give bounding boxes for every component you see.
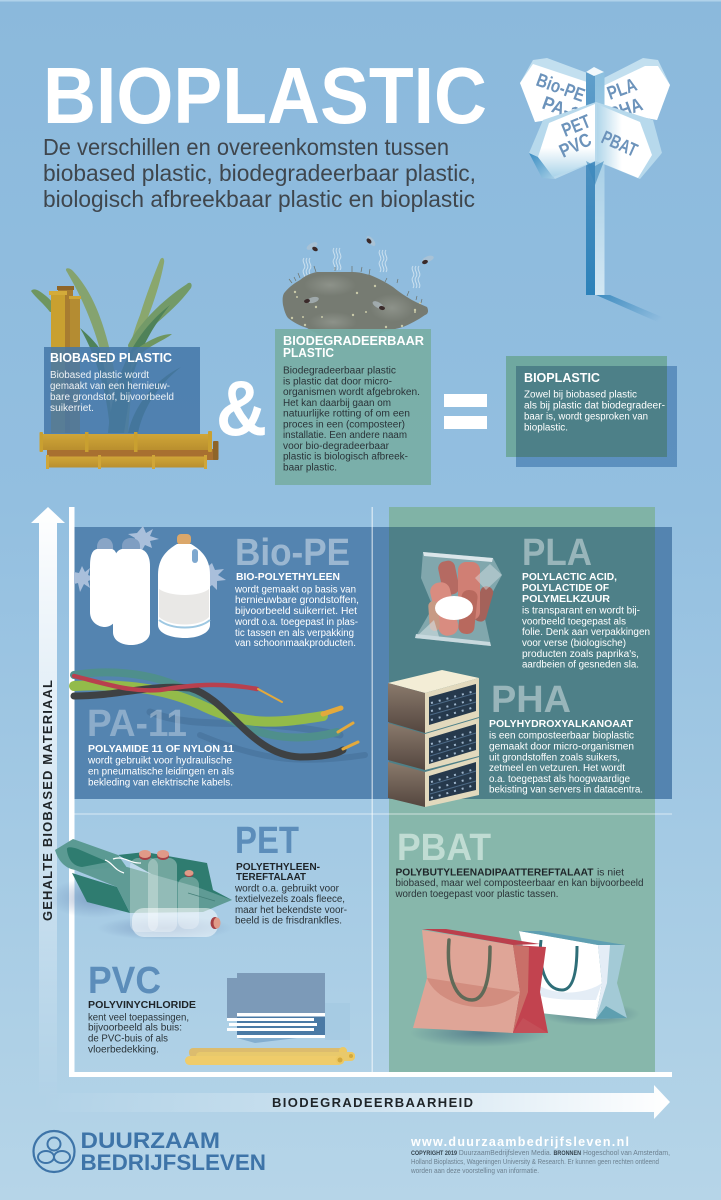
text block: PHA: POLYHYDROXYALKANOAAT — [489, 719, 633, 730]
text block: PHA — [489, 719, 643, 796]
text block: PA-11: bekleding van elektrische kabels. — [88, 778, 233, 788]
logo: duurzaam bedrijfsleven — [34, 1128, 266, 1175]
text block: biobased plastic — [50, 370, 174, 414]
icon: signpost: PVC — [556, 129, 595, 163]
text block: Bio-PE: wordt o.a. toegepast in plas- — [234, 617, 358, 628]
subtitle: biologisch afbreekbaar plastic en bioplastic — [43, 186, 475, 212]
arrow: vertical axis — [31, 507, 65, 1100]
text block: PVC: de PVC-buis of als — [88, 1034, 168, 1044]
text block: Bio-PE: wordt gemaakt op basis van — [234, 584, 356, 596]
panel: bioplastic — [506, 356, 677, 467]
website url: www.duurzaambedrijfsleven.nl — [410, 1135, 629, 1149]
text block: Bio-PE: van schoonmaakproducten. — [235, 638, 356, 649]
text block: PBAT: is niet — [597, 868, 624, 878]
wordmark: DUURZAAM — [80, 1128, 220, 1153]
text block: PVC: POLYVINYCHLORIDE — [88, 1000, 196, 1011]
text block: PLA: folie. Denk aan verpakkingen — [522, 627, 650, 638]
text block: PLA: voorbeeld toegepast als — [522, 616, 626, 628]
copyright and sources — [410, 1148, 670, 1175]
heading: Bio-PE: Bio-PE — [235, 532, 350, 574]
text block: PBAT: POLYBUTYLEENADIPAATTEREFTALAAT — [396, 868, 594, 878]
arrow: horizontal axis — [40, 1085, 670, 1119]
text block: biodegradeerbaar plastic: baar plastic. — [283, 462, 337, 473]
copyright and sources: worden aan deze voorstelling van informatie. — [410, 1166, 539, 1175]
text block: PA-11: en pneumatische leidingen en als — [88, 766, 234, 778]
icon: sugarcane leaves and bamboo canes — [31, 258, 192, 433]
text block: PA-11: wordt gebruikt voor hydraulische — [87, 756, 232, 766]
text block: PET: POLYETHYLEEN- — [236, 862, 320, 873]
text block: bioplastic — [524, 390, 665, 434]
copyright and sources: COPYRIGHT 2019 DuurzaamBedrijfsleven Media. BRONNEN Hogeschool van Amsterdam, — [411, 1148, 670, 1157]
text block: biobased plastic: suikerriet. — [50, 403, 94, 414]
heading: bioplastic: BIOPLASTIC — [524, 371, 600, 385]
heading: PVC: PVC — [88, 960, 161, 1002]
icon: vinyl flooring and PVC pipes — [185, 973, 355, 1065]
text block: biodegradeerbaar plastic — [283, 366, 420, 473]
text block: PLA — [522, 572, 650, 670]
text block: biodegradeerbaar plastic: natuurlijke rotting of om een — [283, 408, 410, 420]
panel: matrix background — [69, 507, 672, 1077]
text block: biobased plastic: gemaakt van een hernieuw- — [50, 381, 170, 392]
text block: PET: textielvezels zoals fleece, — [235, 894, 345, 905]
icon: compost heap with flies — [283, 235, 435, 338]
icon: server crates — [388, 670, 479, 807]
icon: signpost — [520, 58, 676, 323]
text block: PET — [234, 862, 347, 926]
text block: biodegradeerbaar plastic: Het kan daarbij gaan om — [283, 398, 391, 409]
icon: bottles and jug — [74, 526, 226, 645]
text block: PVC: bijvoorbeeld als buis: — [88, 1022, 182, 1034]
text block: PA-11 — [87, 744, 234, 788]
icon: signpost: Bio-PE — [533, 70, 587, 107]
heading: PET: PET — [235, 820, 299, 862]
text block: bioplastic: Zowel bij biobased plastic — [524, 390, 637, 400]
icon: signpost: PBAT — [598, 127, 641, 162]
text block: biobased plastic: Biobased plastic wordt — [50, 370, 149, 381]
text block: PHA: gemaakt door micro-organismen — [489, 742, 634, 752]
heading: PA-11: PA-11 — [87, 703, 187, 745]
copyright and sources: Holland Bioplastics, Wageningen University & Research. Er kunnen geen rechten ontleend — [411, 1157, 659, 1166]
text block: biodegradeerbaar plastic: proces in een (composteer) — [283, 419, 405, 430]
text block: Bio-PE: tic tassen en als verpakking — [235, 628, 354, 639]
text block: PBAT — [395, 868, 644, 900]
text block: biodegradeerbaar plastic: installatie. Een andere naam — [283, 430, 407, 441]
text block: PVC — [88, 1000, 196, 1056]
text block: PET: maar het bekendste voor- — [235, 905, 347, 916]
text block: Bio-PE: hernieuwbare grondstoffen, — [235, 595, 359, 606]
heading: biodegradeerbaar plastic — [283, 334, 424, 360]
heading: biodegradeerbaar plastic: PLASTIC — [283, 346, 334, 360]
text block: PLA: is transparant en wordt bij- — [522, 606, 640, 616]
subtitle: De verschillen en overeenkomsten tussen — [43, 134, 449, 160]
text block: PET: beeld is de frisdrankfles. — [235, 916, 342, 926]
text block: bioplastic: als bij plastic dat biodegradeer- — [524, 400, 665, 412]
text block: PA-11: POLYAMIDE 11 OF NYLON 11 — [88, 744, 234, 755]
text block: PVC: kent veel toepassingen, — [88, 1012, 189, 1024]
text block: biodegradeerbaar plastic: plastic is biologisch afbreek- — [283, 452, 408, 462]
text block: biodegradeerbaar plastic: is plastic dat door micro- — [283, 376, 392, 387]
text block: Bio-PE: BIO-POLYETHYLEEN — [236, 572, 340, 583]
heading: PHA: PHA — [491, 679, 571, 721]
text block: Bio-PE — [234, 572, 359, 649]
text block: PHA: uit grondstoffen zoals suikers, — [489, 752, 620, 764]
text block: bioplastic: baar is, wordt gesproken van — [524, 412, 648, 422]
axis label: gehalte biobased materiaal: GEHALTE BIOBASED MATERIAAL — [40, 680, 55, 921]
text block: PLA: voor verse (biologische) — [522, 638, 626, 649]
text block: PHA: o.a. toegepast als hoogwaardige — [489, 774, 630, 785]
text block: bioplastic: bioplastic. — [524, 422, 568, 434]
heading: biobased plastic: BIOBASED PLASTIC — [50, 351, 172, 365]
icon: signpost: PHA — [607, 94, 646, 126]
text block: biodegradeerbaar plastic: Biodegradeerbaar plastic — [283, 366, 396, 376]
panel: biodegradeerbaar plastic — [275, 329, 431, 485]
text block: PLA: POLYMELKZUUR — [522, 594, 611, 605]
text block: biobased plastic: bare grondstof, bijvoorbeeld — [50, 392, 174, 403]
icon: cables — [74, 672, 365, 760]
icon: fleece and PET bottles — [47, 839, 233, 940]
subtitle: biobased plastic, biodegradeerbaar plastic, — [43, 160, 476, 186]
text block: biodegradeerbaar plastic: voor bio-degradeerbaar — [283, 441, 390, 452]
icon: logo mark — [34, 1131, 74, 1172]
text block: PLA: POLYLACTIC ACID, — [522, 572, 617, 583]
wordmark — [80, 1128, 266, 1175]
text block: PBAT: worden toegepast voor plastic tassen. — [395, 889, 558, 900]
text block: PET: TEREFTALAAT — [236, 872, 306, 883]
text block: PHA: zetmeel en vetzuren. Het wordt — [489, 763, 625, 774]
text block: PET: wordt o.a. gebruikt voor — [234, 884, 340, 894]
text block: PLA: producten zoals paprika's, — [522, 649, 639, 660]
icon: shopping bags — [410, 929, 640, 1047]
icon: signpost: PLA — [605, 75, 640, 105]
axis label: biodegradeerbaarheid: BIODEGRADEERBAARHEID — [272, 1095, 473, 1110]
panel: biobased plastic — [44, 347, 200, 437]
icon: signpost: PET — [559, 111, 594, 142]
text block: Bio-PE: bijvoorbeeld suikerriet. Het — [235, 606, 357, 617]
text block: PLA: aardbeien of gesneden sla. — [522, 660, 639, 670]
heading: biodegradeerbaar plastic: BIODEGRADEERBAAR — [283, 334, 424, 348]
icon: equals sign — [444, 394, 487, 429]
icon: ampersand: & — [216, 364, 267, 452]
title: BIOPLASTIC — [43, 51, 487, 140]
text block: PHA: bekisting van servers in datacentra. — [489, 784, 643, 796]
text block: PLA: POLYLACTIDE OF — [522, 583, 609, 594]
icon: horizontal canes — [40, 431, 218, 469]
wordmark: BEDRIJFSLEVEN — [80, 1150, 266, 1175]
text block: PHA: is een composteerbaar bioplastic — [489, 730, 634, 742]
icon: plastic bag with paprika — [415, 552, 502, 646]
text block: PVC: vloerbedekking. — [88, 1044, 159, 1056]
heading: PLA: PLA — [522, 532, 592, 574]
text block: biodegradeerbaar plastic: organismen wordt afgebroken. — [283, 387, 420, 398]
text block: PBAT: biobased, maar wel composteerbaar en kan bijvoorbeeld — [396, 878, 644, 889]
icon: signpost: PA-11 — [539, 93, 590, 129]
subtitle — [43, 134, 476, 212]
heading: PBAT: PBAT — [397, 827, 491, 869]
